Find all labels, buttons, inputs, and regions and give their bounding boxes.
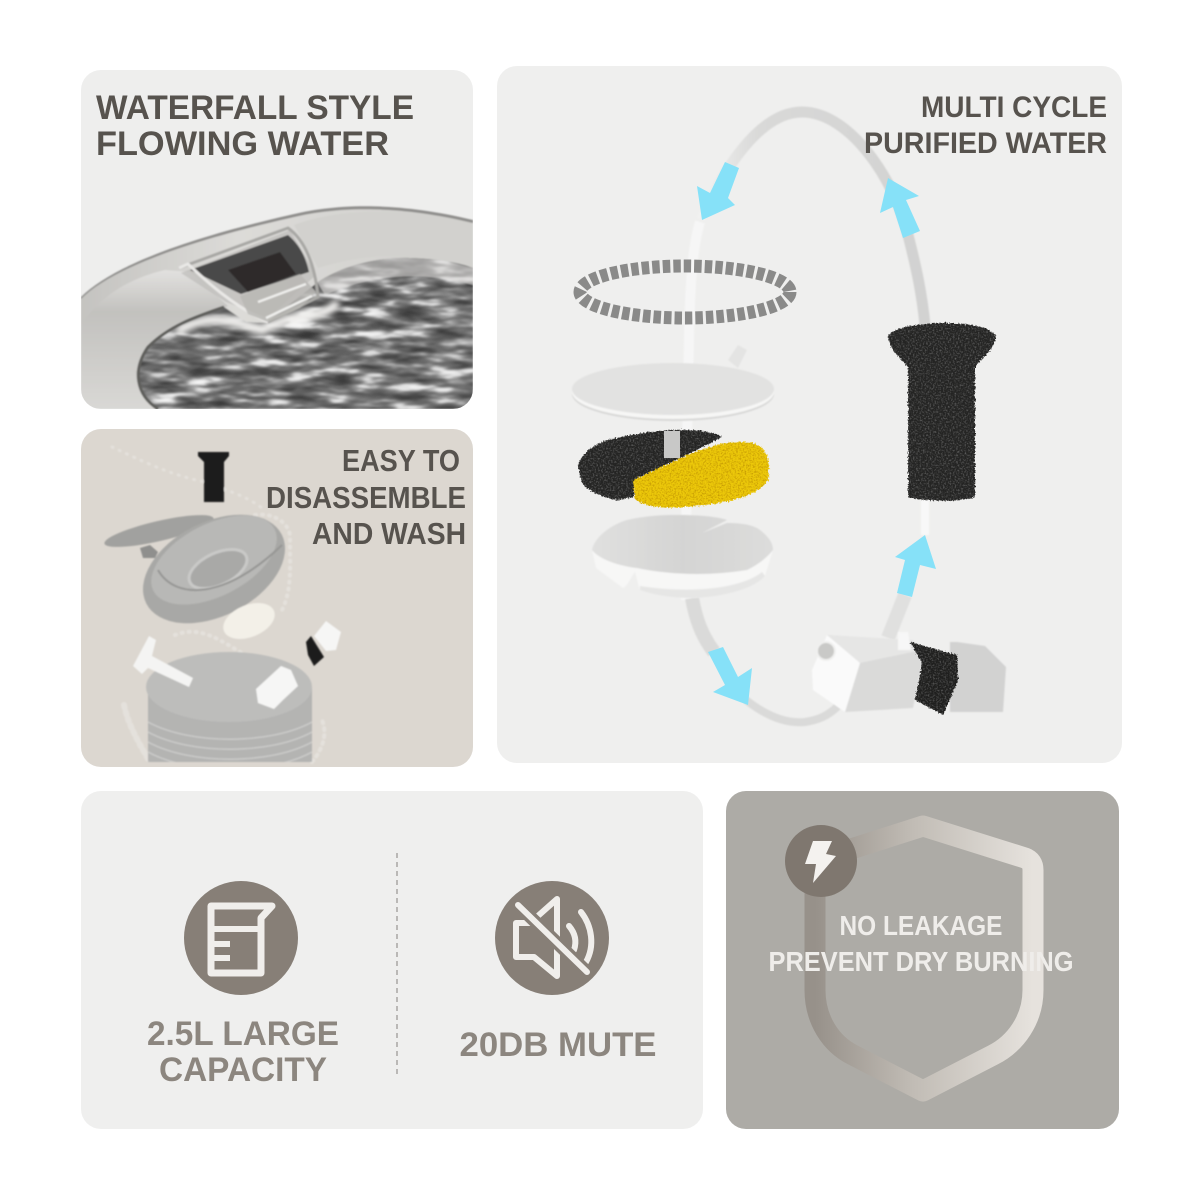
part: upper bowl — [142, 514, 286, 624]
icon: lightning badge — [785, 825, 857, 897]
component: pump — [812, 632, 1006, 712]
component: white filter disc — [572, 345, 774, 421]
arrow: middle right — [895, 535, 936, 597]
part: white pump block — [256, 666, 298, 709]
label: no leakage: NO LEAKAGE — [840, 910, 1002, 941]
part: white T connector — [133, 636, 193, 687]
label: capacity: CAPACITY — [159, 1051, 327, 1089]
cycle tube — [686, 112, 925, 722]
panel: no leakage — [726, 791, 1119, 1129]
component: pump black foam — [910, 642, 958, 715]
icon: shield outline — [815, 826, 1033, 1091]
component: black foam filter — [888, 323, 996, 501]
label: prevent dry burning: PREVENT DRY BURNING — [768, 946, 1074, 977]
part: small black foam — [198, 452, 229, 502]
illustration: fountain bowl with waterfall — [81, 206, 480, 415]
heading: disassemble: DISASSEMBLE — [266, 480, 466, 515]
icon: muted speaker — [495, 881, 609, 995]
heading: flowing water: FLOWING WATER — [96, 125, 389, 163]
component: yellow filter media — [633, 442, 769, 507]
component: tube behind media — [664, 431, 680, 458]
arrow: bottom left — [708, 647, 752, 705]
panel: capacity and mute — [81, 791, 703, 1129]
part: small pump with black foam — [306, 621, 341, 666]
heading: and wash: AND WASH — [312, 516, 466, 551]
heading: easy to: EASY TO — [342, 443, 460, 478]
heading: purified water: PURIFIED WATER — [864, 127, 1107, 160]
heading: waterfall style: WATERFALL STYLE — [96, 89, 414, 127]
illustration: disassembled fountain parts — [102, 447, 341, 779]
component: white filter tray — [592, 515, 773, 598]
label: 2.5L large: 2.5L LARGE — [147, 1015, 339, 1053]
part: round white filter — [223, 602, 275, 640]
heading: multi cycle: MULTI CYCLE — [921, 91, 1107, 124]
label: 20db mute: 20DB MUTE — [460, 1026, 656, 1064]
component: carbon filter media — [578, 430, 722, 500]
part: lower water tank — [146, 652, 312, 762]
panel: easy to disassemble and wash — [81, 429, 473, 779]
arrow: top left — [697, 162, 739, 220]
panel: waterfall style flowing water — [81, 70, 480, 415]
icon: measuring beaker — [184, 881, 298, 995]
panel: multi cycle purified water — [497, 66, 1122, 763]
component: sealing ring — [580, 266, 790, 318]
part: lid plate — [104, 514, 214, 559]
arrow: top right — [880, 178, 920, 238]
